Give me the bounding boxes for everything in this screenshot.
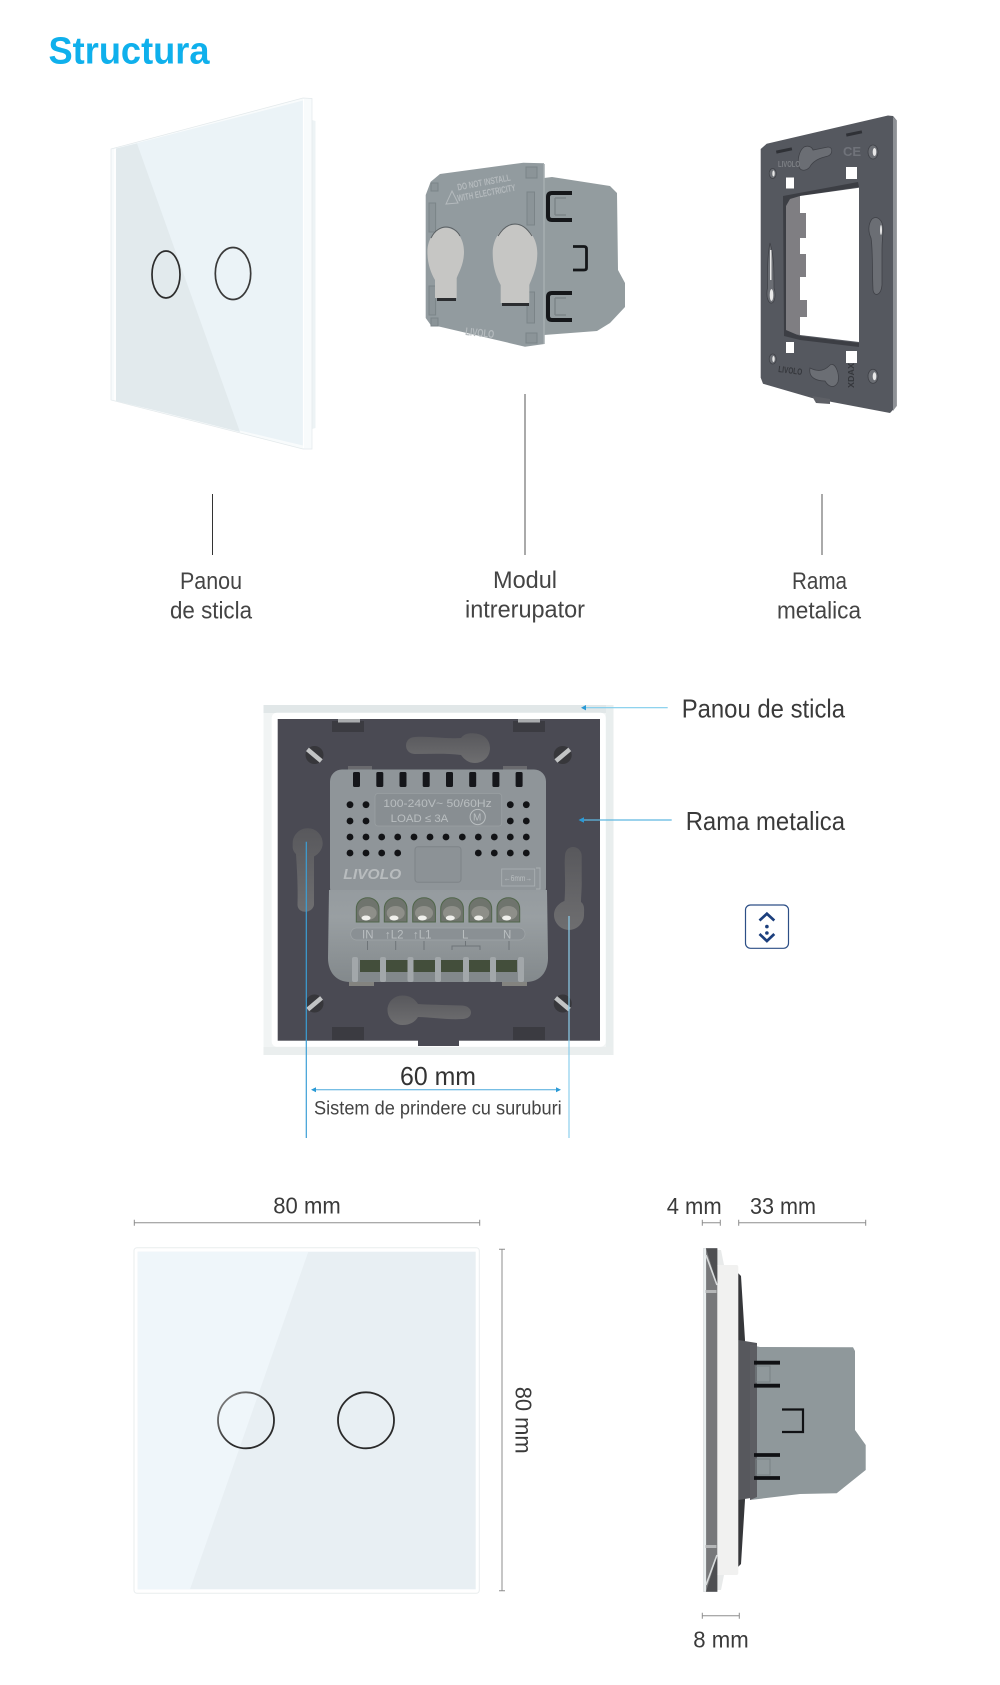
icon: touch button left xyxy=(152,251,180,298)
module back lower body xyxy=(328,890,548,982)
screw terminals xyxy=(356,898,520,922)
dimension: 60 mm mounting distance: Sistem de prindere cu suruburi xyxy=(314,1098,562,1119)
callout: panou de sticla xyxy=(170,494,253,624)
module rating label: LOAD ≤ 3A xyxy=(391,813,449,825)
terminal labels: L xyxy=(462,930,469,942)
frame embossed marks: LIVOLO xyxy=(778,160,800,169)
panel: metal frame perspective view xyxy=(761,116,897,413)
terminal labels: IN xyxy=(362,930,374,942)
dimension: 33 mm module depth xyxy=(739,1193,866,1226)
module side clips xyxy=(548,193,586,320)
wire entry ports xyxy=(352,957,524,982)
rear plate notches xyxy=(332,721,545,1040)
frame embossed marks: LIVOLO xyxy=(778,364,803,377)
module brand logo: LIVOLO xyxy=(343,866,402,883)
callout: rama metalica xyxy=(777,494,862,624)
callout: panou de sticla: Panou xyxy=(180,568,242,595)
panel: side view of switch xyxy=(703,1248,866,1592)
icon: up-down curtain control xyxy=(746,905,788,948)
terminal labels: N xyxy=(503,930,511,942)
frame square cut-outs xyxy=(786,167,857,363)
callout: rama metalica: Rama xyxy=(792,568,848,595)
frame inner wall xyxy=(785,194,808,336)
module rating label: 100-240V~ 50/60Hz xyxy=(383,798,492,810)
side white frame xyxy=(717,1265,738,1575)
rear plate bottom tab xyxy=(418,1040,459,1046)
dimension: 4 mm glass depth: 4 mm xyxy=(667,1193,722,1219)
dimension: 8 mm total front depth xyxy=(693,1613,749,1652)
side glass strip xyxy=(703,1248,717,1592)
callout: rama metalica: metalica xyxy=(777,598,862,624)
module back ventilation dots xyxy=(347,801,530,856)
warning text on module: WITH ELECTRICITY xyxy=(457,183,517,204)
module rating label xyxy=(375,794,502,826)
module back top vents xyxy=(353,772,523,787)
strip length gauge xyxy=(502,868,540,889)
callout: modul intrerupator: Modul xyxy=(493,567,557,594)
rear plate screws xyxy=(306,746,572,1012)
icon: touch button right xyxy=(215,248,251,300)
dimension: 60 mm mounting distance xyxy=(306,842,569,1138)
dimension: height 80 mm xyxy=(499,1249,536,1591)
frame embossed marks xyxy=(778,144,861,388)
icon: touch button left xyxy=(218,1392,274,1448)
module right paddle xyxy=(493,224,537,306)
panel: switch module perspective view xyxy=(426,163,625,347)
side clips xyxy=(754,1363,803,1478)
terminal labels xyxy=(351,928,525,950)
arrow: rama metalica pointer xyxy=(578,817,672,823)
module back upper body xyxy=(330,766,546,986)
title: Structura xyxy=(48,30,210,72)
terminal labels: ↑L1 xyxy=(413,930,432,942)
module brand text: LIVOLO xyxy=(465,326,495,341)
side module collar xyxy=(738,1340,757,1500)
dimension: height 80 mm: 80 mm xyxy=(510,1387,536,1454)
frame window opening xyxy=(800,188,859,342)
dimension: width 80 mm xyxy=(134,1192,480,1226)
rear plate mounting slots xyxy=(293,733,584,1025)
frame mounting slots xyxy=(767,145,883,387)
icon: touch button right xyxy=(338,1392,394,1448)
warning text on module: DO NOT INSTALL xyxy=(457,173,512,193)
frame embossed marks: XDAX xyxy=(847,362,856,388)
callout: panou de sticla: de sticla xyxy=(170,598,253,624)
dimension: width 80 mm: 80 mm xyxy=(273,1192,341,1218)
warning text on module xyxy=(446,173,517,204)
side module body xyxy=(750,1345,866,1500)
callout: modul intrerupator xyxy=(465,394,585,624)
module center square xyxy=(415,847,461,882)
strip length gauge: ←6mm→ xyxy=(504,873,532,883)
dimension: 8 mm total front depth: 8 mm xyxy=(693,1626,749,1652)
panel: glass panel front view xyxy=(134,1248,479,1593)
dimension: 60 mm mounting distance: 60 mm xyxy=(400,1061,476,1091)
arrow: panou de sticla pointer xyxy=(581,705,668,710)
module left paddle xyxy=(427,227,464,301)
panel: rear view of switch xyxy=(264,705,614,1055)
terminal labels: ↑L2 xyxy=(385,930,404,942)
panel: glass panel perspective view xyxy=(111,98,316,449)
label: rama metalica: Rama metalica xyxy=(686,806,845,836)
side dark frame xyxy=(738,1273,745,1567)
frame slot highlights xyxy=(770,148,882,380)
dimension: 33 mm module depth: 33 mm xyxy=(750,1193,816,1219)
frame embossed marks: CE xyxy=(843,144,861,159)
callout: modul intrerupator: intrerupator xyxy=(465,596,585,624)
label: panou de sticla: Panou de sticla xyxy=(682,694,845,724)
module face slots xyxy=(429,167,537,343)
module rating label: M xyxy=(473,812,481,824)
frame tabs xyxy=(776,130,862,154)
